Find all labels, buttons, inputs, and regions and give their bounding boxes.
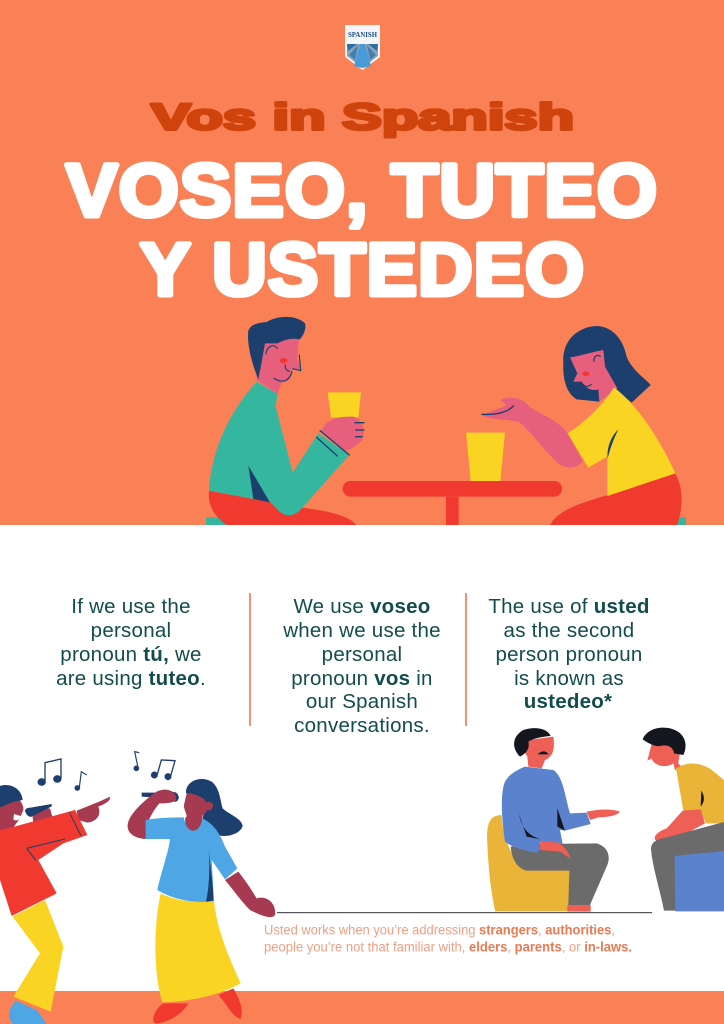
text block: tuteo: pronoun tú, we xyxy=(60,643,202,666)
man: sweater shadow xyxy=(248,466,270,502)
man 2: hair xyxy=(643,728,686,755)
text block: ustedeo: The use of usted xyxy=(488,595,650,618)
text block: voseo xyxy=(282,595,441,737)
cup on table xyxy=(466,433,505,481)
singer 2: skirt xyxy=(155,893,241,1002)
woman: arm and hand xyxy=(482,398,583,468)
singer 1: trousers xyxy=(13,900,63,1012)
text block: tuteo xyxy=(56,595,206,690)
icon: school shield logo xyxy=(345,25,380,70)
woman: shirt xyxy=(568,387,675,496)
musical notes xyxy=(38,752,175,791)
man 1: moustache xyxy=(538,751,548,754)
man: sweater xyxy=(209,382,349,515)
man 1: hair xyxy=(514,728,551,757)
singer 2: raised arm xyxy=(128,790,176,839)
woman: ear and lines xyxy=(593,351,604,364)
text block: ustedeo xyxy=(488,595,650,713)
man 1: shirt folds xyxy=(519,808,565,839)
text block: tuteo: personal xyxy=(91,619,171,642)
man 1: blue shirt xyxy=(502,767,591,853)
text block: voseo: our Spanish xyxy=(306,690,418,713)
man 1: hand on knee xyxy=(539,841,570,858)
footnote: Usted works when you’re addressing strangers, authorities, xyxy=(264,922,615,938)
singer 2: microphone xyxy=(142,792,179,802)
text block: tuteo: If we use the xyxy=(71,595,191,618)
panel: orange header background xyxy=(0,0,724,525)
man 1: face and neck xyxy=(523,737,554,768)
woman: hair back xyxy=(563,326,651,403)
man: neck and face xyxy=(257,335,302,394)
man: cup xyxy=(328,392,361,417)
footnote xyxy=(264,922,632,954)
singer 2: hair xyxy=(186,779,243,836)
singer 1: shoe xyxy=(9,1001,47,1024)
icon: school shield logo: SPANISH xyxy=(348,31,378,39)
man 2: trousers xyxy=(651,822,724,911)
illustration: two singers with microphones xyxy=(0,752,275,1024)
woman: trousers xyxy=(550,473,682,525)
singer 1: microphone xyxy=(25,804,52,817)
man: ear xyxy=(264,344,279,359)
man: ear and facial lines xyxy=(266,346,301,381)
text block: ustedeo: is known as xyxy=(514,667,624,690)
man 1: trousers xyxy=(511,843,609,905)
heading: VOSEO, TUTEO: VOSEO, TUTEO xyxy=(66,149,658,232)
man: hand xyxy=(322,417,364,451)
armchair xyxy=(487,815,569,911)
text block: voseo: We use voseo xyxy=(293,595,431,618)
text block: voseo: pronoun vos in xyxy=(291,667,433,690)
illustration: two men in conversation xyxy=(487,728,724,912)
man: fingers and cuff xyxy=(317,423,364,456)
text block: ustedeo: as the second xyxy=(504,619,634,642)
table leg xyxy=(446,497,459,525)
woman: face and neck xyxy=(570,350,617,402)
man 1: outstretched hand xyxy=(587,810,620,820)
singer 2: shoes xyxy=(153,988,242,1023)
seat right xyxy=(643,517,686,525)
text block: voseo: conversations. xyxy=(294,714,430,737)
man: cheek xyxy=(280,358,288,363)
singer 1: hair xyxy=(0,785,23,807)
panel: orange footer band xyxy=(0,991,724,1024)
ground line xyxy=(277,912,652,913)
singer 2: shirt shadow xyxy=(206,850,213,902)
man: trousers xyxy=(209,491,356,525)
man 2: shirt shadow xyxy=(701,791,704,807)
singer 2: ear xyxy=(204,802,213,810)
woman: cheek xyxy=(582,371,590,376)
text block: tuteo: are using tuteo. xyxy=(56,667,206,690)
illustration: couple talking at a table xyxy=(206,317,686,525)
title: Vos in Spanish: Vos in Spanish xyxy=(151,96,574,138)
text block: ustedeo: person pronoun xyxy=(495,643,643,666)
man 2: arm xyxy=(655,809,705,841)
singer 1: teeth xyxy=(13,814,21,820)
text block: ustedeo: ustedeo* xyxy=(524,690,612,713)
woman: palm line xyxy=(482,406,513,414)
divider left xyxy=(249,593,251,726)
singer 2: lower arm and hand xyxy=(225,872,275,917)
seat left xyxy=(206,517,229,525)
text block: voseo: when we use the xyxy=(282,619,441,642)
footnote: people you’re not that familiar with, elders, parents, or in-laws. xyxy=(264,940,632,954)
man 2: yellow shirt xyxy=(676,764,724,823)
woman: shirt shadow xyxy=(608,429,618,458)
singer 1: shirt lines xyxy=(27,812,81,861)
singer 2: face and neck xyxy=(184,791,214,831)
table top xyxy=(343,481,562,497)
heading: Y USTEDEO: Y USTEDEO xyxy=(140,228,585,311)
singer 1: head and arm skin xyxy=(0,790,110,830)
man 2: blue seat xyxy=(675,851,724,911)
man 2: head xyxy=(647,740,683,770)
divider right xyxy=(465,593,467,726)
man 1: shoes xyxy=(567,905,591,912)
man: hair xyxy=(248,317,305,379)
singer 2: blue shirt xyxy=(146,817,237,902)
singer 1: red shirt xyxy=(0,810,87,916)
text block: voseo: personal xyxy=(322,643,402,666)
